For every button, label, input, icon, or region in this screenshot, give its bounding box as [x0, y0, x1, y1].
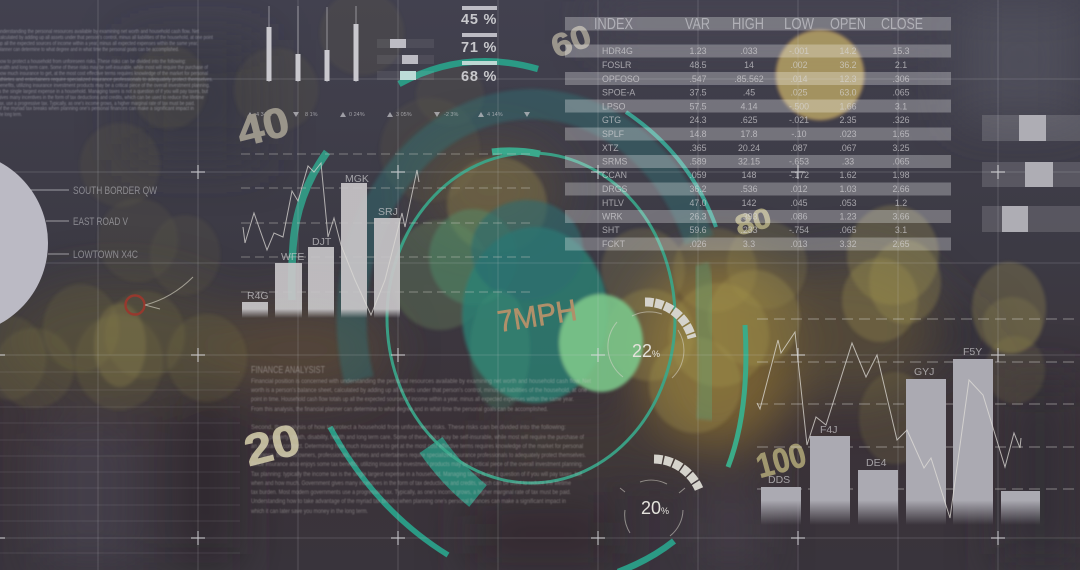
table header: CLOSE — [881, 16, 923, 33]
text block: upper left paragraphs: calculated by adding up all assets under that person's control, minus all liabilities of the household, at one point — [0, 35, 213, 41]
bar labels — [768, 346, 982, 486]
bar labels — [247, 173, 398, 302]
table rows: GTG — [602, 115, 621, 125]
bar labels: WFE — [281, 251, 304, 263]
table rows: SRMS — [602, 156, 628, 166]
table rows: .014 — [790, 74, 808, 84]
table rows: -.500 — [789, 102, 809, 112]
rotated scale numbers: 60 — [546, 17, 596, 65]
table rows: FOSLR — [602, 60, 631, 70]
wide translucent ring: teal — [352, 104, 699, 380]
table rows: FCKT — [602, 239, 626, 249]
bar chart: upper left — [241, 154, 535, 318]
table rows: -.10 — [791, 129, 807, 139]
table rows: 37.5 — [689, 88, 707, 98]
table rows: 2.35 — [839, 115, 857, 125]
text block: finance analysis: which it can later save you money in the long term. — [250, 508, 368, 515]
table header: INDEX — [594, 16, 634, 33]
table rows: 2.66 — [892, 184, 910, 194]
table rows: 17.8 — [740, 129, 758, 139]
pie labels — [73, 185, 157, 261]
table rows: 15.3 — [892, 46, 910, 56]
text block: upper left paragraphs — [0, 29, 213, 118]
lower left arc — [330, 427, 448, 555]
table rows: 24.3 — [689, 115, 707, 125]
table rows: .365 — [689, 143, 707, 153]
table rows: .33 — [842, 156, 854, 166]
text block: upper left paragraphs: how to protect a household from unforeseen risks. These risks can be divided into the following: — [0, 59, 186, 65]
wide translucent ring: green — [697, 265, 710, 420]
table rows: 47.0 — [689, 198, 707, 208]
table rows: 1.98 — [892, 170, 910, 180]
text block: finance analysis: an insurance contract. Determining how much insurance to get at the most cost effective terms requires knowledge of the market for personal — [251, 443, 583, 450]
table rows: 1.62 — [839, 170, 857, 180]
rotated scale numbers: 20 — [239, 415, 305, 476]
table rows: OPFOSO — [602, 74, 640, 84]
text block: upper left paragraphs: athletes and entertainers require specialized insurance professionals to adequately protect themselves. — [0, 77, 213, 83]
table rows: 2.1 — [895, 60, 907, 70]
gauge: 20 percent — [620, 459, 699, 536]
table rows: .026 — [689, 239, 707, 249]
table rows: XTZ — [602, 143, 619, 153]
line overlay — [757, 332, 1021, 518]
pie chart — [0, 151, 157, 335]
ticker row: 4 14% — [487, 112, 503, 118]
gauge: 22 percent — [608, 302, 692, 378]
table rows: 14.8 — [689, 129, 707, 139]
table rows: 3.32 — [839, 239, 857, 249]
text block: finance analysis: Since insurance also enjoys some tax benefits, utilizing insurance investment products may be a critical piece of the overall investment planning. — [251, 461, 583, 468]
table rows: .013 — [790, 239, 808, 249]
percentage readouts — [461, 6, 497, 85]
table rows: .033 — [740, 46, 758, 56]
table rows: .85.562 — [734, 74, 764, 84]
table rows: .536 — [740, 184, 758, 194]
table rows: 63.0 — [839, 88, 857, 98]
ticker row: 0 24% — [349, 112, 365, 118]
text block: upper left paragraphs: health and long term care. Some of these risks may be self-insurable, while most will require the purchase of — [0, 65, 208, 71]
bar labels: R4G — [247, 290, 269, 302]
percentage readouts: 68 % — [461, 69, 497, 85]
table rows: 3.1 — [895, 225, 907, 235]
table rows: LPSO — [602, 102, 626, 112]
percentage readouts: 71 % — [461, 40, 497, 56]
top arc — [399, 61, 538, 84]
pie labels: LOWTOWN X4C — [73, 249, 138, 261]
table rows: 48.5 — [689, 60, 707, 70]
table rows: .306 — [892, 74, 910, 84]
table rows: .065 — [839, 225, 857, 235]
text block: upper left paragraphs: up all the expected sources of income within a year, minus all expected expenses within the same year. — [0, 41, 198, 47]
table rows — [602, 46, 910, 249]
text block: finance analysis: FINANCE ANALYSIST — [251, 365, 325, 376]
table rows: .086 — [790, 212, 808, 222]
table rows: 3.3 — [743, 239, 755, 249]
bar labels: SRJ — [378, 206, 398, 218]
table rows: CCAN — [602, 170, 627, 180]
bars — [761, 359, 1040, 525]
text block: upper left paragraphs: how much insurance to get, at the most cost effective terms requires knowledge of the market for personal — [0, 71, 208, 77]
table rows: .589 — [689, 156, 707, 166]
table rows: .012 — [790, 184, 808, 194]
rotated scale numbers: 80 — [732, 202, 775, 241]
gauge: 20 percent: 20% — [641, 498, 669, 518]
table rows: .625 — [740, 115, 758, 125]
text block: finance analysis: Understanding how to take advantage of the myriad tax breaks when planning one's personal finances can make a significant impact in — [251, 498, 566, 505]
table rows: .45 — [743, 88, 755, 98]
bar labels: MGK — [345, 173, 369, 185]
table header: VAR — [685, 16, 710, 33]
table rows: 57.5 — [689, 102, 707, 112]
gauge: 22 percent: 22% — [632, 341, 660, 361]
table rows: .067 — [839, 143, 857, 153]
ticker row: 3 05% — [396, 112, 412, 118]
percentage readouts: 45 % — [461, 12, 497, 28]
main thin ring — [387, 153, 675, 483]
table header: OPEN — [830, 16, 866, 33]
table rows: 148 — [742, 170, 756, 180]
ticker row: -2 3% — [444, 112, 458, 118]
bar labels: F5Y — [963, 346, 982, 358]
crosshair markers — [0, 165, 1005, 545]
rotated scale numbers: 7MPH — [495, 294, 579, 339]
table rows: DRGS — [602, 184, 628, 194]
table rows: 1.03 — [839, 184, 857, 194]
table rows: HDR4G — [602, 46, 633, 56]
table rows: .059 — [689, 170, 707, 180]
table rows: 1.23 — [839, 212, 857, 222]
table rows: 36.2 — [839, 60, 857, 70]
text block: finance analysis: From this analysis, the financial planner can determine to what degree and in what time the personal goals can be accomplished. — [251, 406, 548, 413]
table rows: SPOE-A — [602, 88, 635, 98]
table rows: -.001 — [789, 46, 809, 56]
table rows: SHT — [602, 225, 620, 235]
bar labels: DJT — [312, 236, 332, 248]
table rows: 14.2 — [839, 46, 857, 56]
rotated scale numbers: 40 — [232, 97, 294, 156]
rotated scale numbers — [232, 17, 810, 486]
table rows: SPLF — [602, 129, 625, 139]
text block: upper left paragraphs: tax. use a progressive tax. Typically, as one's income grows, a higher marginal rate of tax must be paid. — [0, 101, 195, 107]
bar labels: F4J — [820, 424, 838, 436]
bars — [242, 183, 400, 318]
table rows: .547 — [689, 74, 707, 84]
table rows: 36.2 — [689, 184, 707, 194]
table bands — [565, 17, 951, 250]
horizontal range bars — [377, 39, 434, 80]
table rows: 12.3 — [839, 74, 857, 84]
bar labels: GYJ — [914, 366, 934, 378]
ticker row: 4 34% — [256, 112, 272, 118]
table rows: .065 — [892, 88, 910, 98]
table header: HIGH — [732, 16, 764, 33]
table rows: 32.15 — [738, 156, 760, 166]
table rows: 14 — [744, 60, 754, 70]
table rows: .233 — [740, 225, 758, 235]
table rows: .053 — [839, 198, 857, 208]
table rows: .045 — [790, 198, 808, 208]
teal glow discs — [390, 200, 643, 410]
table header — [594, 16, 923, 33]
ticker row — [247, 112, 530, 118]
upper right arc — [626, 112, 716, 227]
pie labels: SOUTH BORDER QW — [73, 185, 157, 197]
bar labels: DE4 — [866, 457, 887, 469]
text block: finance analysis: Tax planning: typically the income tax is the single largest expense in a household. Managing taxes is not a question of if you will pay taxes, but — [251, 471, 582, 478]
table rows: 1.23 — [689, 46, 707, 56]
right side level bars — [982, 115, 1080, 232]
right arc — [728, 325, 746, 467]
table rows: -.653 — [789, 156, 809, 166]
lower segment — [431, 445, 478, 496]
table rows: -.754 — [789, 225, 809, 235]
table header: LOW — [784, 16, 814, 33]
table rows: 3.1 — [895, 102, 907, 112]
text block: upper left paragraphs: benefits, utilizing insurance investment products may be a critical piece of the overall investment planning. — [0, 83, 210, 89]
table rows: .002 — [790, 60, 808, 70]
candlestick chart — [266, 6, 358, 82]
table rows: 1.2 — [895, 198, 907, 208]
text block: finance analysis: insurance. Business owners, professionals, athletes and entertainers require specialized insurance professionals to adequately protect themselves. — [251, 452, 586, 459]
table rows: 2.65 — [892, 239, 910, 249]
table rows: 3.25 — [892, 143, 910, 153]
text block: finance analysis: worth is a person's balance sheet, calculated by adding up all assets under that person's control, minus all liabilities of the household, at one — [250, 387, 587, 394]
text block: finance analysis: when and how much. Government gives many incentives in the form of tax deductions and credits, which can be used to reduce the lifetime — [250, 480, 571, 487]
bar chart: lower right — [757, 319, 1080, 525]
table rows: 1.66 — [839, 102, 857, 112]
table rows: .393 — [740, 212, 758, 222]
bar labels: DDS — [768, 474, 790, 486]
text block: upper left paragraphs: planner can determine to what degree and in what time the personal goals can be accomplished. — [0, 47, 179, 53]
table rows: 59.6 — [689, 225, 707, 235]
text block: finance analysis: Second, the analysis of how to protect a household from unforeseen risks. These risks can be divided into the following: — [251, 424, 566, 431]
table rows: 26.3 — [689, 212, 707, 222]
text block: finance analysis — [250, 365, 591, 515]
rotated scale numbers: 100 — [752, 436, 810, 486]
table rows: -.021 — [789, 115, 809, 125]
table rows: 4.14 — [740, 102, 758, 112]
table rows: .023 — [839, 129, 857, 139]
left arc — [292, 152, 327, 300]
text block: finance analysis: Financial position is concerned with understanding the personal resources available by examining net worth and household cash flow. Net — [251, 378, 591, 385]
text block: upper left paragraphs: of the myriad tax breaks when planning one's personal finances can make a significant impact in — [0, 106, 194, 112]
table rows: WRK — [602, 212, 623, 222]
table rows: .087 — [790, 143, 808, 153]
table rows: HTLV — [602, 198, 624, 208]
table — [565, 16, 951, 250]
text block: finance analysis: point in time. Household cash flow totals up all the expected sources of income within a year, minus all expected expenses within the same year. — [251, 396, 574, 403]
table rows: .326 — [892, 115, 910, 125]
table rows: 142 — [742, 198, 756, 208]
bottom arc — [618, 541, 674, 570]
pie labels: EAST ROAD V — [73, 216, 128, 228]
table rows: 3.66 — [892, 212, 910, 222]
text block: upper left paragraphs: understanding the personal resources available by examining net worth and household cash flow. Net — [0, 29, 199, 35]
bokeh: bright gold light — [776, 30, 864, 120]
bokeh lights — [0, 0, 1046, 464]
text block: finance analysis: liability, property, death, disability, health and long term care. Some of these risks may be self-insurable, while most will require the purchase of — [251, 434, 584, 441]
ticker row: 8 1% — [305, 112, 318, 118]
table rows: .065 — [892, 156, 910, 166]
text block: upper left paragraphs: gives many incentives in the form of tax deductions and credits, which can be used to reduce the lifetime — [0, 95, 204, 101]
text block: upper left paragraphs: is the single largest expense in a household. Managing taxes is not a question of if you will pay taxes, but — [0, 89, 208, 95]
table rows: 20.24 — [738, 143, 760, 153]
table rows: .025 — [790, 88, 808, 98]
red location marker — [126, 277, 193, 314]
table rows: -.172 — [789, 170, 809, 180]
text block: finance analysis: tax burden. Most modern governments use a progressive tax. Typically, as one's income grows, a higher marginal rate of tax must be paid. — [251, 489, 571, 496]
concentric HUD rings — [292, 61, 746, 570]
table rows: 1.65 — [892, 129, 910, 139]
line overlay — [243, 163, 419, 315]
